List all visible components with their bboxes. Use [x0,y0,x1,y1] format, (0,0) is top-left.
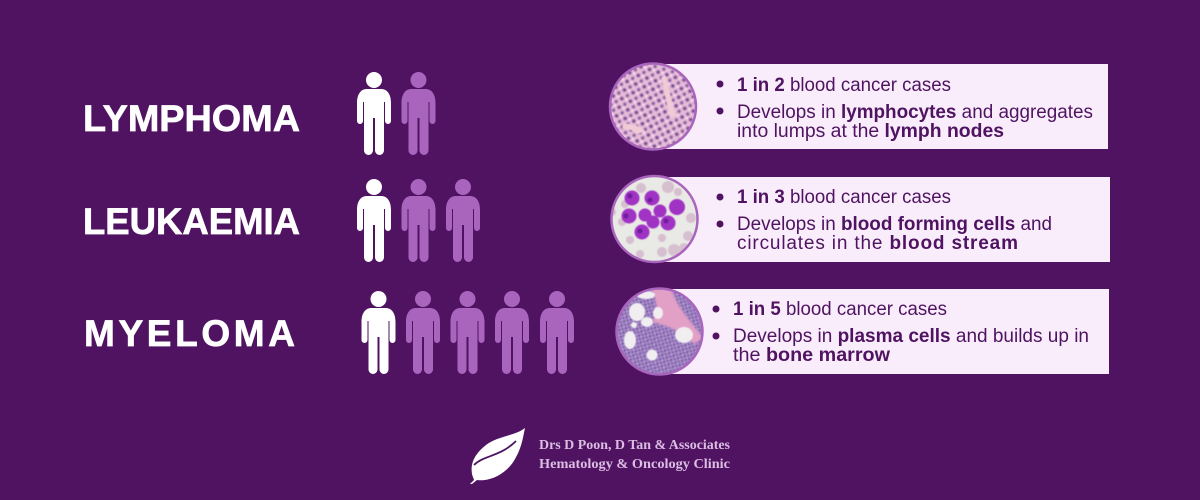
icon: purple person [450,291,484,374]
icon: purple person [540,291,574,374]
fact: frequency: 1 in 2 blood cancer cases [737,75,951,96]
heading: myeloma: MYELOMA [84,313,295,354]
logo [470,428,730,484]
panel: lymphoma facts [650,64,1108,149]
people row: myeloma, 1 in 5 [362,291,574,374]
bullet [712,306,720,312]
fact: frequency: 1 in 3 blood cancer cases [737,187,951,208]
fact: origin line two: circulates in the blood stream [737,233,1018,254]
icon: white person [357,179,391,262]
icon: leaf [470,428,525,484]
fact: origin line two: the bone marrow [733,345,890,366]
panel: myeloma facts [655,289,1109,374]
heading: leukaemia: LEUKAEMIA [83,201,300,242]
bullet [716,80,724,88]
bullet [716,108,724,114]
icon: purple person [406,291,440,374]
bullet [712,332,720,340]
panel: leukaemia facts [650,177,1110,262]
people row: lymphoma, 1 in 2 [357,72,436,155]
fact: origin line two: into lumps at the lymph nodes [737,121,1004,142]
micrograph: myeloma bone marrow [615,287,704,376]
heading: lymphoma: LYMPHOMA [83,98,300,139]
bullet [716,220,724,228]
fact: origin line one: Develops in blood forming cells and [737,214,1052,235]
bullet [716,194,724,200]
micrograph: lymphoma tissue [608,62,698,151]
icon: white person [362,291,396,374]
icon: white person [357,72,391,155]
logo text: clinic partners: Drs D Poon, D Tan & Associates [539,437,730,452]
icon: purple person [402,179,436,262]
micrograph: leukaemia blood smear [608,176,698,262]
fact: origin line one: Develops in plasma cells and builds up in [733,326,1089,347]
icon: purple person [402,72,436,155]
fact: frequency: 1 in 5 blood cancer cases [733,299,947,320]
icon: purple person [495,291,529,374]
icon: purple person [446,179,480,262]
logo text: clinic name: Hematology & Oncology Clinic [539,456,730,471]
people row: leukaemia, 1 in 3 [357,179,480,262]
fact: origin line one: Develops in lymphocytes and aggregates [737,102,1093,123]
